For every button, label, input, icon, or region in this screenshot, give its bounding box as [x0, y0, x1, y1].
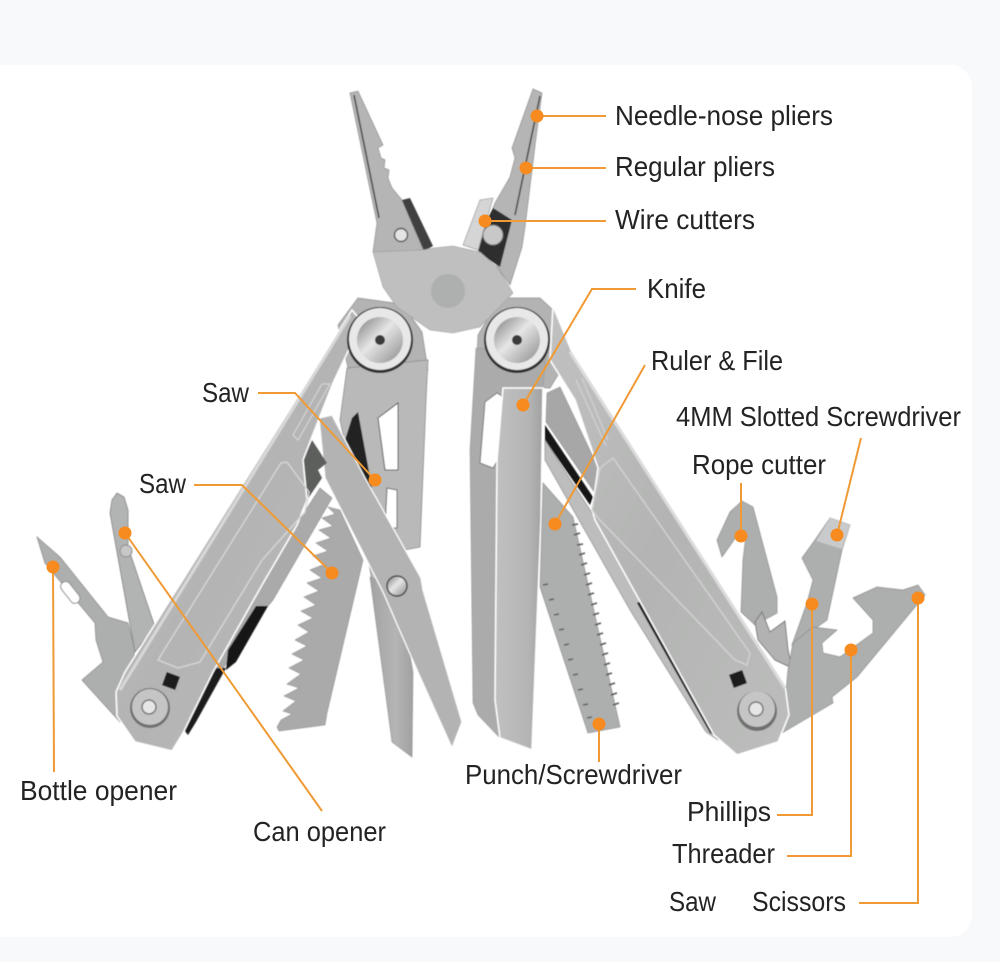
dark plate: [478, 208, 512, 267]
jaw screw: [483, 225, 503, 245]
upper strip right: [546, 387, 598, 493]
right threader tool: [782, 585, 925, 733]
right handle edge: [570, 352, 785, 688]
left dark insert: [402, 198, 433, 251]
left center frame: [340, 360, 428, 590]
label: saw upper: Saw: [202, 377, 250, 408]
label: can opener: Can opener: [253, 816, 386, 847]
label: wire cutters: Wire cutters: [615, 204, 755, 235]
left tool: bottle opener: [37, 537, 135, 722]
right jaw groove: [515, 96, 540, 215]
left jaw groove: [354, 95, 379, 218]
bottle opener slot: [59, 579, 82, 605]
right handle panel outline: [592, 458, 750, 665]
label: needle-nose pliers: Needle-nose pliers: [615, 100, 833, 131]
left handle: [116, 310, 362, 751]
label: knife: Knife: [647, 273, 706, 304]
ruler left ticks: [543, 584, 592, 718]
scissors pivot: [387, 576, 407, 596]
multitool illustration: [37, 89, 925, 757]
knife front plate: [495, 388, 543, 750]
right pliers jaw: [493, 89, 542, 285]
black inner spacer left: [226, 606, 268, 670]
black lower spacer left: [184, 668, 226, 735]
label: phillips: Phillips: [687, 796, 771, 827]
left pliers jaw: [350, 91, 423, 252]
frame dark gap: [345, 412, 372, 488]
left torx screw: [130, 688, 170, 728]
label: ruler and file: Ruler & File: [651, 345, 783, 376]
frame lower slot: [385, 488, 397, 528]
lower strip right: [545, 440, 720, 740]
left handle highlight edge: [120, 316, 350, 690]
left grey strip under handle: [190, 488, 332, 700]
callout dots: [46, 110, 924, 730]
frame slots: [378, 403, 398, 470]
left handle upper groove: [293, 384, 330, 440]
pliers hub: [373, 246, 513, 333]
left pivot cap: [347, 307, 413, 373]
slotted screwdriver tip: [816, 518, 850, 549]
knife slot: [480, 393, 508, 468]
label: saw lower: Saw: [139, 468, 187, 499]
right square hole: [729, 670, 747, 688]
right torx screw: [737, 691, 777, 731]
rear tip detail: [120, 545, 132, 557]
left handle dark gear: [303, 440, 327, 500]
label: scissors: Scissors: [752, 886, 846, 917]
label: rope cutter: Rope cutter: [692, 449, 826, 480]
ruler ticks: [572, 524, 619, 705]
label: bottle opener: Bottle opener: [20, 775, 177, 806]
left square hole: [162, 672, 180, 690]
left pivot housing: [338, 298, 428, 372]
label: regular pliers: Regular pliers: [615, 151, 775, 182]
label: threader: Threader: [672, 838, 775, 869]
right pivot housing: [476, 298, 572, 388]
wire cutter serration: [463, 198, 493, 250]
saw blade: [277, 507, 363, 731]
right handle upper groove: [576, 378, 608, 446]
ruler: [540, 483, 620, 733]
right pivot cap: [484, 307, 550, 373]
left handle panel outline: [158, 462, 309, 668]
left jaw rivet: [394, 228, 408, 242]
right small hook: [755, 612, 792, 668]
label: saw bottom: Saw: [669, 886, 717, 917]
right slotted screwdriver tool: [792, 518, 850, 645]
scissors lower blade: [370, 577, 413, 757]
leader lines: [53, 116, 918, 903]
right rope cutter tool: [717, 501, 777, 625]
black spacer right: [545, 425, 593, 505]
label: slotted screwdriver: 4MM Slotted Screwdriver: [676, 401, 961, 432]
black lower handle spacer: [637, 598, 725, 740]
left tool: phillips can opener: [110, 493, 155, 652]
right handle: [550, 306, 789, 755]
scissors upper blade: [319, 415, 462, 748]
label: punch screwdriver: Punch/Screwdriver: [465, 759, 682, 790]
hub logo disc: [431, 274, 465, 308]
knife blade rear: [470, 348, 546, 750]
